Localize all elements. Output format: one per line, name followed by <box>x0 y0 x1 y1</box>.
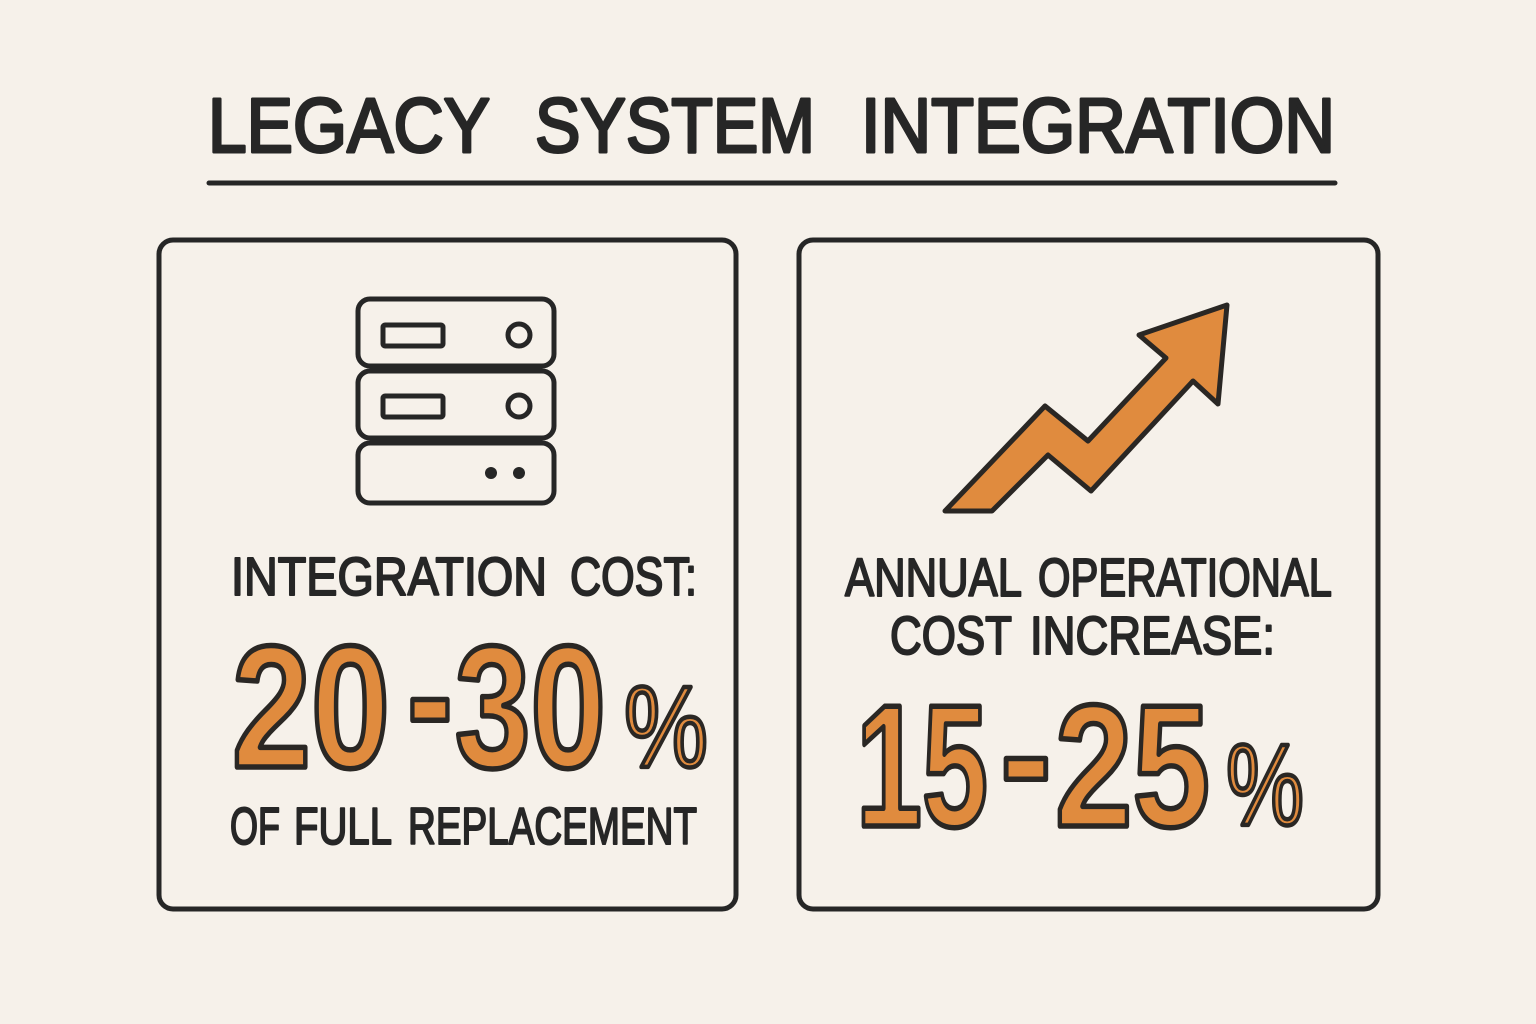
value: 20-30%: 20 <box>232 609 390 804</box>
panel: integration cost <box>159 240 736 909</box>
value: 20-30%: % <box>624 662 708 792</box>
icon: server stack <box>358 299 554 503</box>
label: annual operational cost increase <box>845 548 1332 666</box>
value: 15-25%: 15 <box>856 668 988 863</box>
title <box>208 83 1335 169</box>
panel: operational cost <box>799 240 1378 909</box>
label: of full replacement: OF <box>230 798 280 856</box>
label: of full replacement <box>230 798 697 856</box>
value: 20-30%: 30 <box>455 609 606 804</box>
icon: rising arrow <box>945 305 1227 511</box>
value: 15-25%: - <box>1000 656 1052 851</box>
label: annual operational cost increase: ANNUAL <box>845 548 1022 608</box>
label: of full replacement: FULL <box>294 798 392 856</box>
value: 15-25%: % <box>1226 720 1304 850</box>
value: 15-25%: 25 <box>1055 668 1210 863</box>
title: SYSTEM <box>535 83 815 169</box>
label: integration cost: INTEGRATION <box>231 547 547 607</box>
label: annual operational cost increase: COST <box>890 606 1012 666</box>
title underline <box>209 180 1335 186</box>
title: INTEGRATION <box>861 83 1335 169</box>
value: 15-25% <box>856 656 1304 863</box>
label: annual operational cost increase: OPERATIONAL <box>1038 548 1332 608</box>
label: integration cost: COST: <box>570 547 697 607</box>
value: 20-30%: - <box>407 597 453 792</box>
title: LEGACY <box>208 83 490 169</box>
label: of full replacement: REPLACEMENT <box>408 798 697 856</box>
label: annual operational cost increase: INCREASE: <box>1030 606 1275 666</box>
value: 20-30% <box>232 597 708 804</box>
